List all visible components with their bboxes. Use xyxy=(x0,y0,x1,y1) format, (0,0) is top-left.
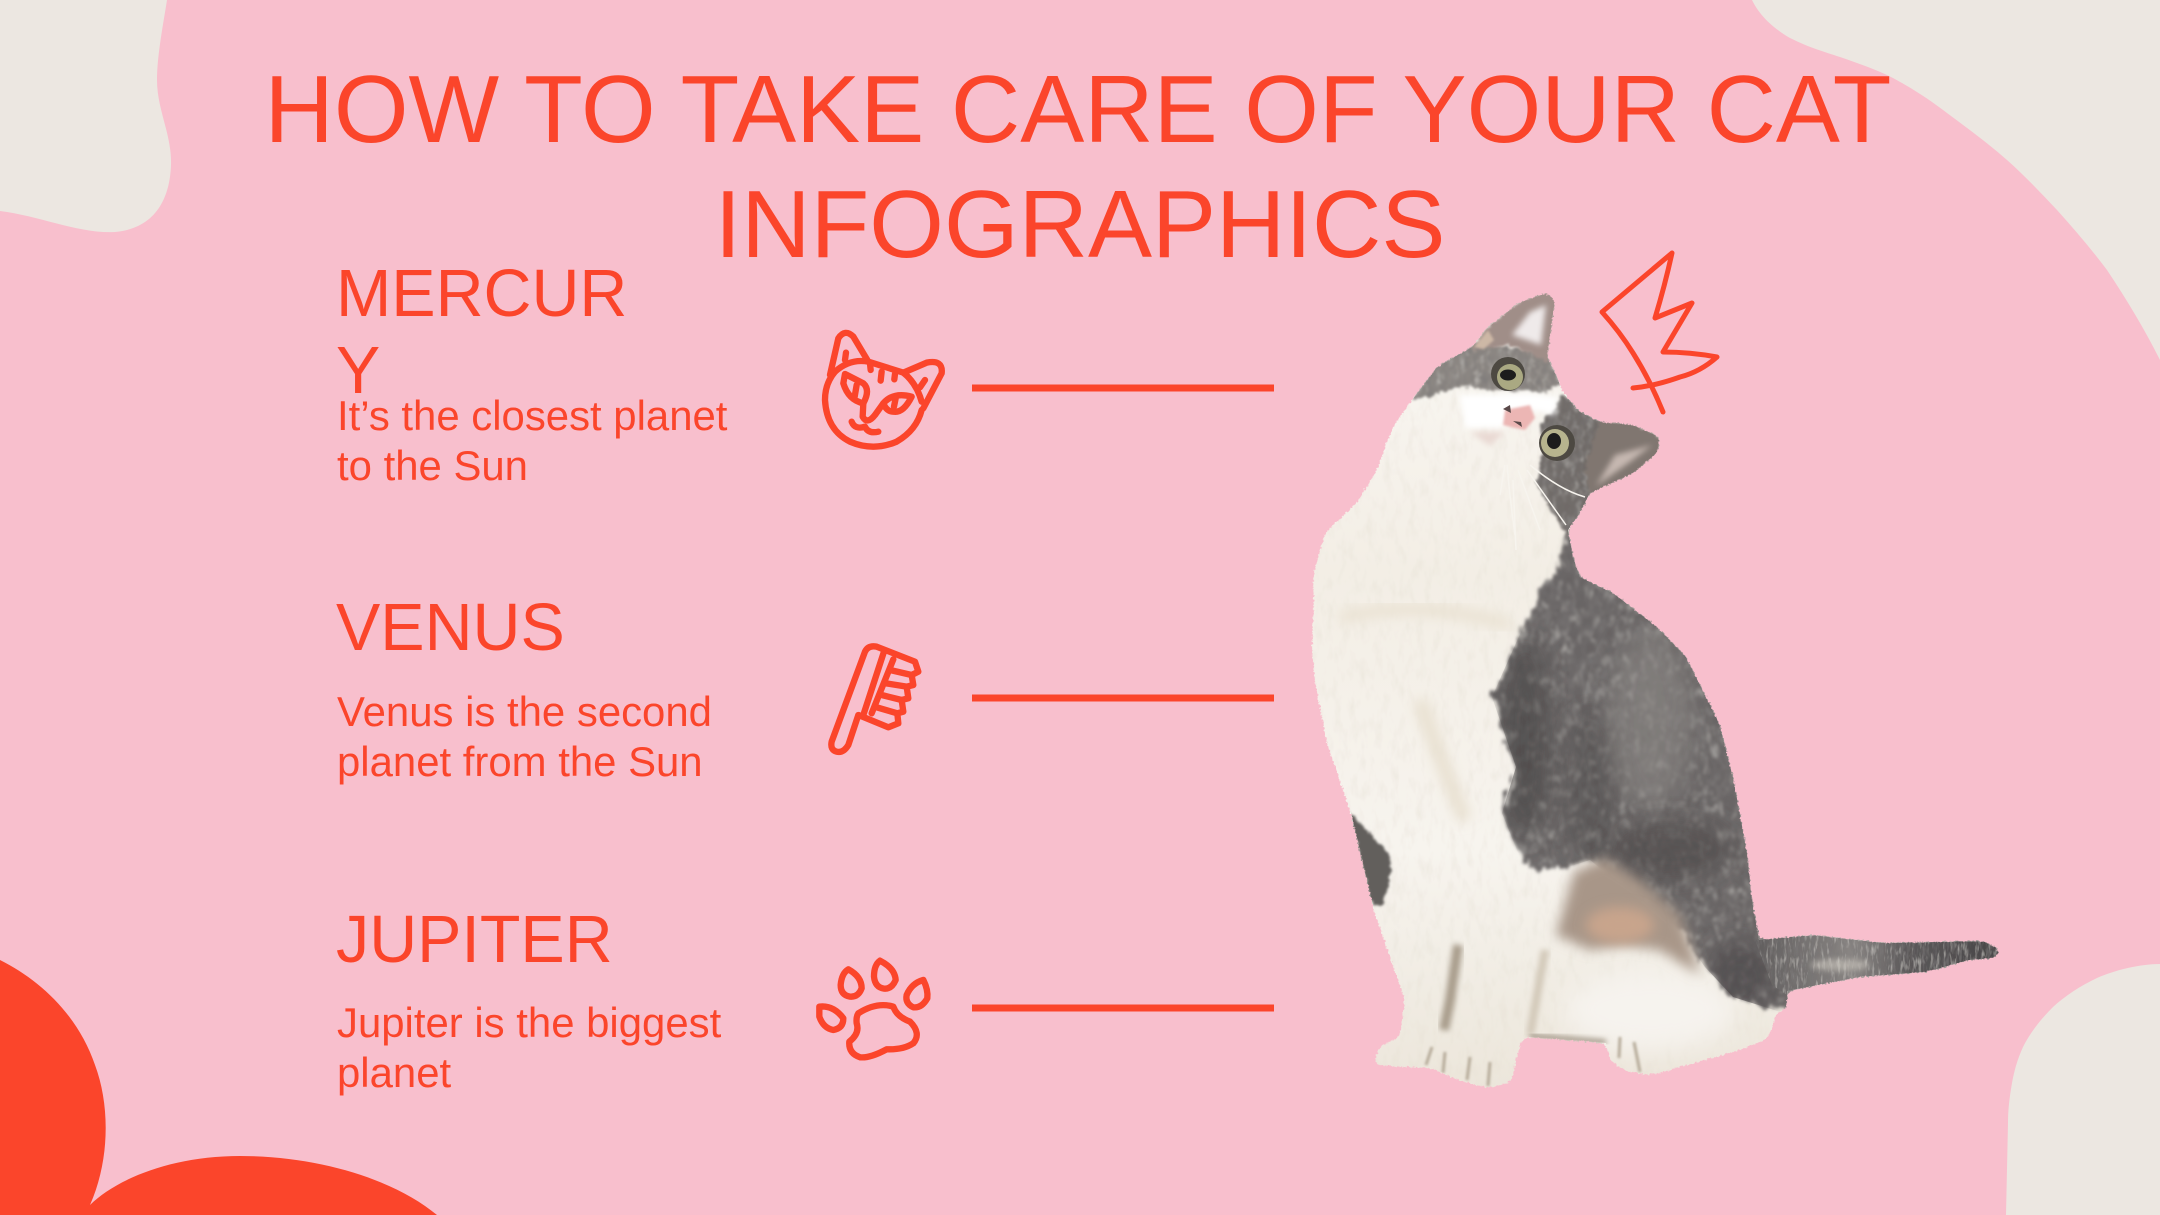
item: Mercury heading xyxy=(336,257,627,408)
blob: bottom-right cream xyxy=(2006,964,2160,1215)
eye top xyxy=(1491,357,1525,391)
connector line 3 xyxy=(972,1004,1274,1012)
icon: crown doodle xyxy=(1602,253,1717,412)
illustration: sitting cat xyxy=(1312,290,2005,1088)
shadow between legs xyxy=(1444,945,1458,1030)
tail xyxy=(1755,935,2005,995)
icon: paw xyxy=(819,961,927,1057)
right ear xyxy=(1585,420,1662,495)
top ear xyxy=(1472,290,1558,362)
muzzle xyxy=(1460,394,1558,428)
eye lower xyxy=(1539,425,1575,461)
item: Venus description: planet from the Sun xyxy=(337,738,703,785)
icon: cat face xyxy=(825,333,942,447)
item: Jupiter heading: JUPITER xyxy=(336,903,613,977)
brown haunch tuft xyxy=(1556,858,1700,975)
whiskers xyxy=(1512,467,1589,550)
shadow under belly xyxy=(1530,1036,1606,1042)
gray body patch xyxy=(1492,533,1795,1015)
paws xyxy=(1426,1037,1640,1086)
connector line 1 xyxy=(972,384,1274,392)
item: Venus description: Venus is the second xyxy=(337,688,712,735)
blob: bottom-left red xyxy=(0,960,437,1215)
chest shading xyxy=(1340,609,1510,625)
item: Jupiter description xyxy=(337,999,722,1096)
item: Venus heading: VENUS xyxy=(336,591,565,665)
title: INFOGRAPHICS xyxy=(715,171,1445,278)
gray head right side and neck xyxy=(1537,395,1645,538)
title: HOW TO TAKE CARE OF YOUR CAT xyxy=(265,56,1891,163)
cat silhouette base xyxy=(1312,293,2001,1088)
item: Jupiter description: planet xyxy=(337,1049,451,1096)
cat details clipped to silhouette xyxy=(1340,290,2005,1086)
gray leg patch xyxy=(1347,810,1392,905)
blob: top-left cream xyxy=(0,0,171,232)
item: Mercury heading: MERCUR xyxy=(336,257,627,331)
icon: brush xyxy=(831,646,918,752)
item: Mercury description: It’s the closest planet xyxy=(337,392,728,439)
gray head top xyxy=(1412,342,1562,400)
item: Jupiter description: Jupiter is the biggest xyxy=(337,999,722,1046)
item: Mercury description: to the Sun xyxy=(337,442,528,489)
connector line 2 xyxy=(972,694,1274,702)
item: Mercury description xyxy=(337,392,728,489)
item: Venus description xyxy=(337,688,712,785)
gray body shading xyxy=(1501,630,1774,1020)
title xyxy=(265,56,1891,278)
blob: top-right cream xyxy=(1752,0,2160,360)
item: Mercury heading: Y xyxy=(336,334,380,408)
